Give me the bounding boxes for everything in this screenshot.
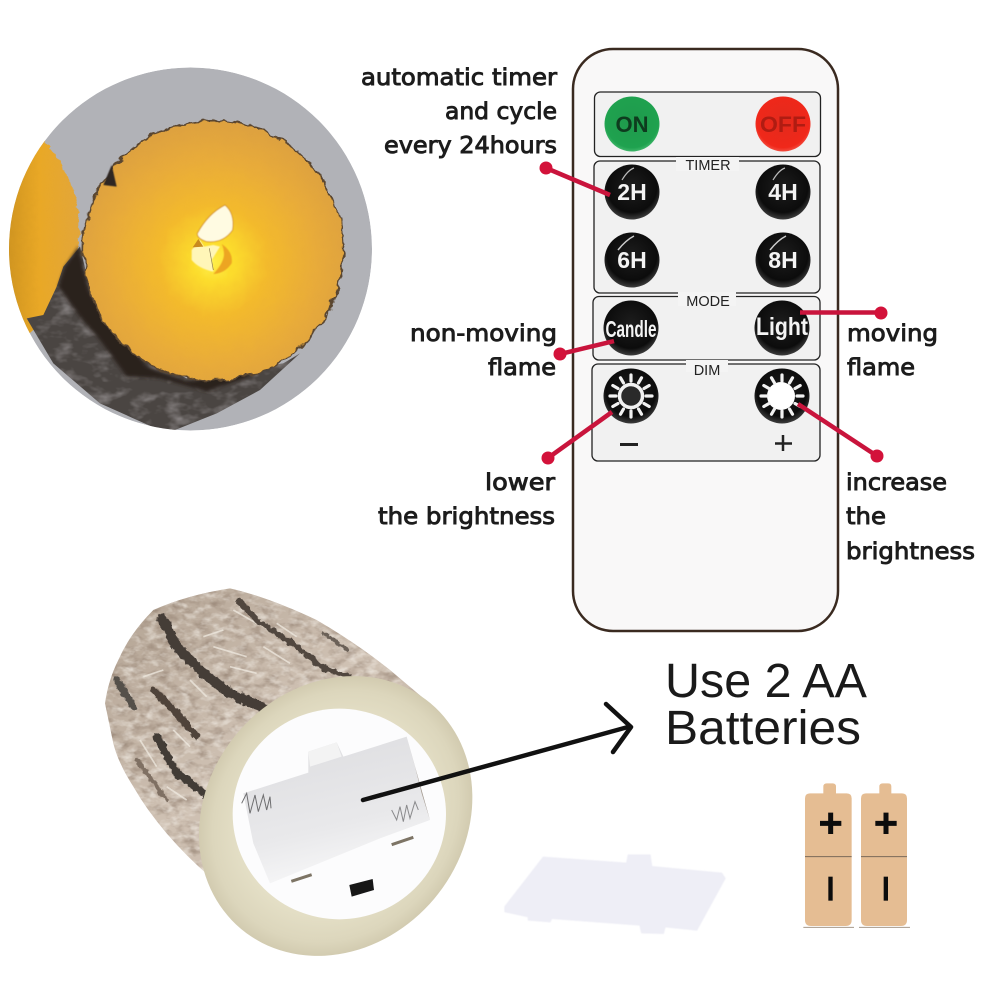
inner white battery housing [233, 709, 446, 919]
mode heading: MODE [686, 294, 730, 310]
dim heading [686, 360, 728, 379]
label: increase the brightness: brightness [846, 539, 975, 565]
bark light flecks [140, 610, 297, 800]
wick [209, 248, 213, 270]
flame orange crescent [213, 244, 232, 274]
power section frame [594, 92, 820, 156]
ON button [604, 96, 660, 152]
label: non-moving flame: non-moving [410, 321, 557, 347]
battery label: Batteries [665, 702, 861, 755]
dark bark shadow [58, 247, 253, 392]
compartment tab [308, 742, 342, 767]
right wall with bark showing [407, 737, 430, 820]
label: increase the brightness: the [846, 504, 886, 530]
dim section frame [592, 364, 820, 461]
OFF button: OFF [760, 112, 806, 137]
remote control [573, 49, 838, 631]
rim notch [103, 165, 117, 187]
arrow to battery label [363, 704, 631, 800]
label: moving flame: flame [847, 355, 915, 381]
left neighbouring candle wax [9, 140, 82, 334]
flame lower part [192, 240, 220, 272]
battery one [803, 783, 854, 927]
dim minus sun button [604, 368, 658, 424]
contact slot left [291, 875, 312, 881]
battery compartment cover [505, 855, 725, 933]
bark dark grooves [117, 600, 350, 800]
plus sign [775, 435, 792, 451]
label: non-moving flame: flame [488, 355, 556, 381]
6H button [604, 232, 660, 288]
Candle button: Candle [606, 316, 656, 342]
mode section frame [593, 296, 820, 360]
Candle button [604, 300, 658, 356]
timer section frame [594, 161, 820, 293]
remote body [573, 49, 838, 631]
4H button: 4H [768, 179, 798, 205]
callout line: lower brightness [542, 412, 612, 464]
flame left spot [193, 239, 203, 247]
dark bark below candles [20, 243, 307, 437]
callout line: increase brightness [798, 404, 884, 462]
label: automatic timer: every 24hours [384, 133, 557, 159]
dim plus sun button [754, 368, 810, 424]
ON button: ON [616, 112, 648, 137]
AA batteries icon [803, 783, 910, 927]
candle flame photo circle [0, 68, 372, 437]
battery label: Use 2 AA [665, 655, 867, 708]
candle base with battery compartment [105, 588, 472, 956]
6H button: 6H [617, 247, 647, 273]
wax rim [142, 620, 529, 1002]
flame white part [197, 205, 233, 242]
label: increase the brightness: increase [846, 470, 947, 496]
4H button [756, 164, 810, 220]
label: lower the brightness: lower [485, 470, 556, 496]
minus sign [620, 443, 638, 446]
contact slot right [392, 837, 413, 845]
left spring [242, 793, 271, 813]
bark body [105, 588, 422, 872]
timer heading [676, 157, 739, 174]
label: lower the brightness: the brightness [378, 504, 555, 530]
battery two [859, 783, 910, 927]
8H button [756, 232, 810, 288]
2H button [604, 164, 660, 220]
power switch [349, 879, 374, 897]
label: automatic timer: and cycle [445, 99, 557, 125]
label: moving flame: moving [847, 321, 938, 347]
callout line: non-moving flame [554, 341, 614, 360]
2H button: 2H [617, 179, 647, 205]
callout line: moving flame [800, 306, 888, 320]
main candle wax top [83, 121, 343, 381]
Light button: Light [756, 313, 809, 341]
timer heading: TIMER [685, 158, 731, 174]
right spring [392, 802, 418, 822]
8H button: 8H [768, 247, 798, 273]
OFF button [756, 96, 810, 152]
battery compartment cavity [243, 737, 430, 883]
mode heading [678, 292, 736, 310]
label: automatic timer: automatic timer [361, 65, 558, 91]
Light button [754, 300, 810, 356]
dim heading: DIM [694, 363, 720, 379]
callout line: timer [540, 162, 610, 195]
